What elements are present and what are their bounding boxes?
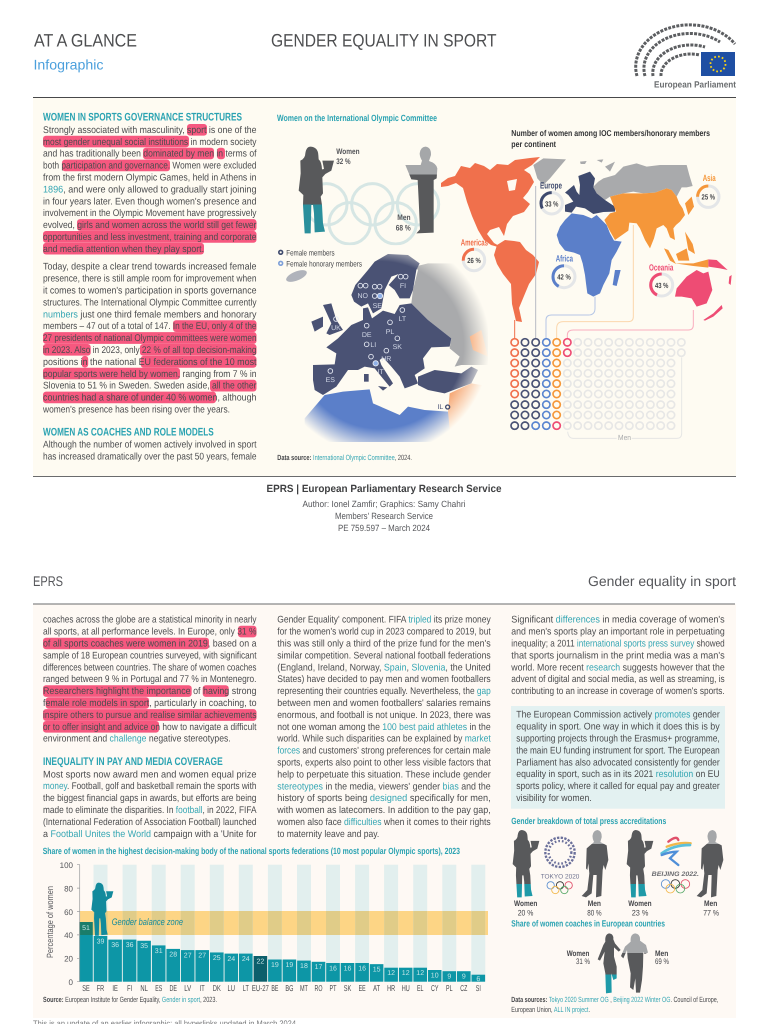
- x axis labels: BE: [271, 983, 279, 993]
- labels: coaches values: Women: [567, 949, 589, 958]
- chart title: women on the IOC: Women on the International Olympic Committee: [277, 113, 437, 123]
- paragraph: today despite: numbers just one third female members and honorary: [43, 309, 257, 320]
- bar value labels: 18: [300, 963, 308, 970]
- paragraph: strongly associated: evolved, girls and women across the world still get fewer: [43, 220, 257, 231]
- logo: European Parliament: [636, 25, 736, 89]
- donut: Asia 25: [698, 173, 719, 207]
- bar value labels: 51: [82, 925, 90, 932]
- paragraph: coaches: coaches across the globe are a statistical minority in nearly: [43, 615, 257, 626]
- gender balance zone band: [80, 911, 488, 935]
- bar value labels: 17: [315, 964, 322, 971]
- paragraph: coaches start: has increased dramatically over the past 50 years, female: [43, 452, 256, 463]
- icon: olympic rings with woman and man: [299, 147, 439, 244]
- title: at a glance: AT A GLANCE: [34, 30, 137, 50]
- legend: female members: Female honorary members: [286, 260, 362, 268]
- x axis labels: MT: [300, 983, 308, 993]
- region: Europe: [565, 172, 615, 214]
- paragraph: coaches: Researchers highlight the importance of having strong: [43, 686, 256, 697]
- paragraph: strongly associated: Strongly associated with masculinity, sport is one of the: [43, 125, 256, 136]
- paragraph: today despite: positions in the national EU federations of the 10 most: [43, 357, 257, 368]
- paragraph: today despite: members – 47 out of a total of 147. In the EU, only 4 of the: [43, 321, 256, 332]
- markers: countries with female members: IL: [437, 404, 443, 411]
- bar value labels: 24: [242, 956, 250, 963]
- labels: coaches values: 31 %: [576, 957, 590, 966]
- x axis labels: RO: [314, 983, 323, 993]
- data source: IOC: Data source: International Olympic Committee, 2024.: [277, 453, 412, 462]
- legend: female members: Female members: [286, 248, 335, 258]
- y axis: 20: [64, 955, 74, 964]
- map: Europe lens: [304, 245, 488, 442]
- donut: Americas 26: [461, 238, 488, 271]
- paragraph: equal prize money: money. Football, golf and basketball remain the sports with: [43, 781, 256, 792]
- chart title: share of women coaches: Share of women coaches in European countries: [511, 918, 665, 928]
- text block: column two page two: world. While such disparities can be explained by market: [276, 734, 491, 745]
- x axis labels: EU-27: [252, 983, 269, 993]
- legend: female members: [279, 248, 362, 268]
- x axis labels: SK: [344, 983, 351, 993]
- donut: Asia 25: 25 %: [702, 193, 715, 202]
- x axis labels: DK: [213, 983, 221, 993]
- paragraph: equal prize money: a Football Unites the World campaign with a 'Unite for: [43, 829, 257, 840]
- region: Asia: [604, 188, 708, 268]
- labels: accreditation values: Women: [628, 899, 652, 908]
- markers: countries with female members: LI: [370, 342, 376, 349]
- text block: column two page two: stereotypes in the media, viewers' gender bias and the: [277, 781, 491, 792]
- paragraph: today despite: Slovenia to 51 % in Sweden. Sweden aside, all the other: [43, 381, 257, 392]
- donut: Oceania 43: [649, 262, 674, 296]
- paragraph: coaches: inspire others to pursue and realise similar achievements: [43, 710, 257, 721]
- markers: countries with female members: PL: [386, 329, 394, 336]
- markers: countries with female members: FI: [400, 283, 406, 290]
- labels: accreditation values: Men: [704, 899, 717, 908]
- labels: coaches values: 69 %: [655, 957, 669, 966]
- figures: Tokyo and Beijing accreditation: [513, 830, 723, 897]
- bar value labels: 16: [358, 966, 366, 972]
- text block: column two page two: history of sports being designed specifically for men,: [277, 793, 491, 804]
- x axis labels: PT: [330, 983, 336, 993]
- text block: column three media coverage: inequality; a 2011 international sports press survey showed: [511, 638, 725, 650]
- text block: column two page two: between men and women footballers' salaries remains: [277, 698, 491, 709]
- logo: European Parliament: European Parliament: [654, 80, 736, 90]
- x axis labels: AT: [373, 983, 380, 993]
- label: men 68: Men: [397, 213, 411, 222]
- paragraph: coaches start: Although the number of women actively involved in sport: [43, 440, 257, 451]
- paragraph: strongly associated: both participation and governance. Women were excluded: [43, 161, 256, 172]
- paragraph: coaches start: [43, 440, 257, 463]
- x axis labels: PL: [446, 983, 453, 993]
- region: Greenland and Russia: [533, 158, 693, 200]
- labels: accreditation values: [514, 899, 719, 918]
- region: Americas: [441, 157, 540, 322]
- x axis labels: CY: [431, 983, 439, 993]
- text block: column two page two: forces and customers' strong preferences for certain male: [277, 746, 491, 757]
- bar value labels: 15: [373, 966, 381, 974]
- bar value labels: 16: [344, 966, 351, 972]
- bar value labels: 19: [286, 962, 293, 969]
- donut: Africa 42: 42 %: [557, 273, 571, 282]
- markers: countries with female members: HR: [381, 356, 391, 363]
- text block: column two page two: enormous, and football is not unique. In 2023, there was: [277, 710, 491, 721]
- dot grid: IOC members: [511, 339, 685, 438]
- text block: column two page two: for the women's world cup in 2023 compared to 2019, but: [277, 627, 491, 638]
- y axis: 40: [64, 931, 74, 940]
- paragraph: equal prize money: Most sports now award men and women equal prize: [43, 769, 256, 780]
- panel: page one background: [33, 98, 736, 476]
- y axis: 80: [64, 884, 74, 893]
- text block: column three media coverage: that sports journalism in the print media was a man's: [511, 650, 725, 661]
- paragraph: strongly associated: [43, 125, 257, 255]
- labels: coaches values: Men: [655, 949, 668, 958]
- data sources: right column: European Union, ALL IN project.: [511, 1005, 590, 1014]
- map: world by continent: [441, 157, 732, 322]
- labels: accreditation values: Men: [588, 899, 601, 908]
- bar value labels: 12: [416, 970, 424, 977]
- bar value labels: 10: [431, 972, 439, 980]
- label: men 68: [396, 213, 411, 232]
- chart title: number of women per continent: Number of women among IOC members/honorary members: [511, 128, 710, 138]
- callout: European Commission: Parliament has also advocated consistently for gender: [516, 757, 720, 768]
- bar value labels: 16: [329, 966, 337, 972]
- text block: column two page two: representing their countries equally. Nevertheless, the gap: [277, 686, 491, 697]
- text block: column two page two: [276, 615, 491, 840]
- paragraph: today despite: it comes to women's participation in sports governance: [43, 286, 256, 296]
- paragraph: equal prize money: (International Federation of Association Football) launched: [43, 817, 256, 828]
- bar value labels: 35: [140, 943, 148, 950]
- callout: European Commission: supporting projects through the Erasmus+ programme,: [516, 734, 720, 744]
- callout: European Commission: equality in sport. One way in which it does this is by: [516, 722, 720, 733]
- text block: column two page two: Gender Equality' component. FIFA tripled its prize money: [277, 615, 491, 626]
- callout: European Commission: [511, 706, 725, 809]
- x axis labels: ES: [155, 983, 162, 993]
- heading: governance: WOMEN IN SPORTS GOVERNANCE STRUCTURES: [43, 112, 242, 124]
- markers: countries with female members: SE: [373, 303, 382, 310]
- text block: column two page two: help to perpetuate this situation. These include gender: [277, 769, 491, 780]
- paragraph: strongly associated: in four years later. Even though women's presence and: [43, 196, 256, 207]
- x axis labels: BG: [285, 983, 293, 993]
- text block: column two page two: this was still only a third of the prize fund for the men's: [277, 638, 491, 650]
- icon: Tokyo emblem: [545, 838, 575, 894]
- paragraph: today despite: presence, there is still ample room for improvement when: [43, 274, 256, 285]
- paragraph: today despite: women's presence has been rising over the years.: [42, 404, 230, 416]
- x axis labels: IE: [112, 983, 118, 993]
- chart title: Share of women in the highest decision-making body of the national sports federations (10 most popular Olympic sports), 2023: [43, 846, 460, 856]
- paragraph: strongly associated: 1896, and were only allowed to gradually start joining: [43, 184, 256, 195]
- donut: Europe 33: [540, 180, 562, 214]
- x axis labels: LU: [228, 983, 235, 993]
- region: Oceania: [675, 259, 732, 321]
- callout: European Commission: The European Commission actively promotes gender: [516, 710, 720, 721]
- labels: accreditation values: Women: [514, 899, 537, 908]
- donut: Europe 33: 33 %: [545, 199, 559, 208]
- bars: [79, 935, 485, 982]
- paragraph: today despite: in 2023. Also in 2023, only 22 % of all top decision-making: [43, 345, 256, 356]
- figures: running woman and man: [598, 933, 648, 993]
- paragraph: strongly associated: most gender unequal social institutions in modern society: [43, 137, 257, 148]
- text block: column two page two: similar competition. Several national football federations: [277, 650, 491, 661]
- paragraph: strongly associated: and media attention when they play sport.: [43, 244, 204, 255]
- paragraph: today despite: 27 presidents of national Olympic committees were women: [43, 333, 256, 344]
- markers: countries with female members: LT: [398, 316, 407, 323]
- callout: European Commission: the main EU funding instrument for sport. The European: [516, 745, 720, 756]
- data sources: right column: [511, 995, 718, 1014]
- paragraph: strongly associated: from the first modern Olympic Games, held in Athens in: [43, 172, 256, 184]
- heading: inequality: INEQUALITY IN PAY AND MEDIA COVERAGE: [43, 756, 223, 768]
- paragraph: coaches: sample of 18 European countries surveyed, with significant: [43, 650, 257, 661]
- paragraph: coaches: all sports, at all performance levels. In Europe, only 31 %: [43, 627, 257, 638]
- x axis labels: EE: [359, 983, 366, 993]
- chart title: number of women per continent: [511, 128, 710, 149]
- region: Africa: [557, 213, 622, 297]
- connector lines: [515, 186, 693, 338]
- panel: page two background: [33, 604, 736, 1018]
- callout: European Commission: equality in sport, such as in its 2021 resolution on EU: [516, 769, 720, 780]
- donut: Asia 25: Asia: [703, 173, 716, 183]
- paragraph: strongly associated: involvement in the Olympic Movement have progressively: [43, 208, 257, 219]
- text block: column two page two: with women as latecomers. In addition to the pay gap,: [276, 805, 491, 816]
- labels: accreditation values: 80 %: [587, 908, 602, 918]
- main title: GENDER EQUALITY IN SPORT: [271, 30, 496, 50]
- donut: Europe 33: Europe: [540, 180, 562, 190]
- bar value labels: 12: [402, 970, 410, 977]
- markers: countries with female members: IT: [378, 369, 385, 376]
- bar: Sweden in zone: [79, 922, 93, 935]
- callout: European Commission: sports policy, where it called for equal pay and greater: [516, 781, 720, 792]
- paragraph: today despite: countries had a share of under 40 % women, although: [43, 393, 256, 404]
- heading: coaches: WOMEN AS COACHES AND ROLE MODELS: [43, 426, 214, 438]
- credits block: [266, 483, 502, 533]
- text block: column two page two: (England, Ireland, Norway, Spain, Slovenia, the United: [277, 662, 491, 673]
- markers: countries with female members: DE: [362, 332, 372, 339]
- figures: Tokyo and Beijing accreditation: TOKYO 2020: [541, 874, 580, 880]
- text block: column two page two: not one woman among the 100 best paid athletes in the: [277, 722, 491, 733]
- bar value labels: 19: [271, 962, 279, 969]
- x axis labels: CZ: [460, 983, 467, 993]
- label: women 32: [336, 147, 360, 166]
- text block: women in sports governance structures: [42, 112, 257, 416]
- labels: accreditation values: 23 %: [632, 908, 648, 918]
- paragraph: coaches: ranged between 9 % in Portugal and 77 % in Montenegro.: [43, 674, 256, 685]
- text block: column two page two: States) have decided to pay men and women footballers: [277, 674, 491, 685]
- paragraph: strongly associated: and has traditionally been dominated by men in terms of: [43, 149, 257, 160]
- text block: column one page two: [43, 615, 257, 840]
- label: women 32: Women: [336, 147, 360, 156]
- x axis labels: [82, 983, 481, 993]
- bar value labels: 12: [387, 970, 395, 977]
- paragraph: equal prize money: [43, 769, 257, 840]
- source line: Source: European Institute for Gender Equality, Gender in sport, 2023.: [43, 995, 217, 1004]
- chart title: number of women per continent: per continent: [511, 139, 556, 149]
- subtitle: infographic: Infographic: [34, 56, 104, 72]
- figures: Tokyo and Beijing accreditation: BEIJING 2022.: [652, 871, 699, 878]
- y axis: 0: [69, 978, 74, 987]
- donut: Africa 42: [553, 254, 575, 288]
- bar value labels: 24: [227, 956, 235, 963]
- donut: Oceania 43: Oceania: [649, 262, 674, 272]
- text block: column three media coverage: world. More recent research suggests however that the: [510, 662, 725, 673]
- text block: column three media coverage: Significant differences in media coverage of women's: [511, 615, 725, 626]
- running header: gender equality in sport: Gender equality in sport: [588, 573, 736, 589]
- text block: column three media coverage: advent of digital and social media, as well as streaming, is: [511, 674, 725, 685]
- x axis labels: LT: [243, 983, 249, 993]
- icon: Beijing emblem: [661, 838, 691, 893]
- bar value labels: 6: [476, 976, 480, 983]
- bar value labels: 27: [184, 952, 192, 960]
- paragraph: coaches: of all sports coaches were women in 2019, based on a: [43, 638, 257, 650]
- paragraph: coaches: or to offer insight and advice on how to navigate a difficult: [43, 722, 257, 733]
- paragraph: today despite: Today, despite a clear trend towards increased female: [43, 262, 256, 273]
- icon: striped ellipse: [285, 268, 308, 284]
- credits block: Author: Ionel Zamfir; Graphics: Samy Chahri: [302, 499, 466, 509]
- x axis labels: EL: [417, 983, 424, 993]
- markers: countries with female members: ES: [326, 377, 335, 384]
- x axis labels: LV: [184, 983, 191, 993]
- label: men bracket: Men: [618, 433, 631, 442]
- label: women 32: 32 %: [336, 157, 351, 166]
- bar value labels: 25: [213, 955, 221, 962]
- credits block: Members' Research Service: [335, 511, 433, 521]
- bar value labels: 36: [111, 942, 119, 949]
- donut: Americas 26: 26 %: [467, 256, 481, 265]
- donut: Africa 42: Africa: [556, 254, 574, 264]
- paragraph: strongly associated: opportunities and less investment, training and corporate: [43, 232, 256, 243]
- bar value labels: 39: [97, 938, 104, 946]
- paragraph: coaches: female role models in sport, particularly in coaching, to: [43, 698, 256, 709]
- y axis: [45, 861, 80, 987]
- markers: countries with female members: NO: [357, 293, 369, 300]
- bar chart: share of women in sports federations: [43, 846, 488, 1004]
- markers: countries with female members: [326, 274, 450, 411]
- bar value labels: [82, 925, 480, 983]
- highlights: first paragraph: [43, 124, 256, 403]
- callout: European Commission: visibility for women.: [516, 793, 592, 804]
- x axis labels: DE: [169, 983, 177, 993]
- y axis: Percentage of women: [45, 886, 55, 958]
- y axis: 100: [60, 861, 74, 870]
- bar value labels: 36: [126, 942, 134, 949]
- labels: coaches values: [567, 949, 669, 966]
- labels: accreditation values: 77 %: [703, 908, 719, 918]
- credits block: EPRS | European Parliamentary Research Service: [266, 483, 502, 495]
- highlights: coaches: [43, 626, 256, 733]
- x axis labels: SI: [476, 983, 481, 993]
- x axis labels: NL: [140, 983, 148, 993]
- bar value labels: 9: [462, 974, 466, 980]
- paragraph: today despite: structures. The International Olympic Committee currently: [43, 297, 257, 308]
- bar value labels: 22: [257, 958, 264, 966]
- header: [34, 25, 736, 89]
- bar value labels: 28: [169, 952, 177, 958]
- bar value labels: 9: [447, 974, 451, 980]
- label: men 68: 68 %: [396, 224, 411, 232]
- text block: column three media coverage: contributing to an increase in coverage of women's sports.: [511, 686, 725, 697]
- bar: EU-27 average: [254, 956, 267, 982]
- data sources: right column: Data sources: Tokyo 2020 Summer OG , Beijing 2022 Winter OG. Council of Europe,: [511, 995, 718, 1004]
- x axis labels: FR: [97, 983, 104, 993]
- text block: column two page two: women also face difficulties when it comes to their rights: [276, 817, 491, 828]
- running header: EPRS: EPRS: [33, 573, 63, 589]
- text block: column two page two: to maternity leave and pay.: [277, 829, 379, 840]
- paragraph: coaches: [43, 615, 257, 745]
- paragraph: equal prize money: the biggest financial gaps in awards, but efforts are being: [43, 793, 256, 804]
- bar value labels: 27: [198, 952, 206, 960]
- markers: countries with female members: UK: [331, 325, 341, 332]
- x axis labels: HR: [387, 983, 395, 993]
- paragraph: today despite: popular sports were held by women, ranging from 7 % in: [43, 369, 256, 380]
- paragraph: today despite: [42, 262, 257, 416]
- text block: women as coaches intro: [43, 426, 257, 463]
- text block: column three media coverage: and men's sports play an important role in perpetuating: [511, 627, 725, 638]
- y axis: 60: [64, 908, 74, 917]
- label: gender balance zone: Gender balance zone: [112, 917, 183, 928]
- paragraph: coaches: differences between countries. The share of women coaches: [43, 662, 257, 673]
- donut: Oceania 43: 43 %: [655, 281, 669, 290]
- x axis labels: IT: [200, 983, 205, 993]
- paragraph: coaches: environment and challenge negative stereotypes.: [43, 734, 231, 745]
- icon: woman silhouette: [91, 883, 113, 936]
- donut: Americas 26: Americas: [461, 238, 488, 248]
- text block: column two page two: sports, experts also point to other less visible factors that: [277, 758, 491, 768]
- labels: accreditation values: 20 %: [518, 908, 533, 918]
- markers: countries with female members: SK: [393, 344, 402, 351]
- text block: column three media coverage: [510, 615, 725, 697]
- paragraph: equal prize money: made to eliminate the disparities. In football, in 2022, FIFA: [43, 805, 257, 816]
- x axis labels: HU: [402, 983, 410, 993]
- bar value labels: 31: [155, 948, 163, 955]
- credits block: PE 759.597 – March 2024: [338, 523, 430, 533]
- x axis labels: FI: [127, 983, 132, 993]
- chart title: press accreditations: Gender breakdown of total press accreditations: [511, 816, 666, 826]
- x axis labels: SE: [82, 983, 90, 993]
